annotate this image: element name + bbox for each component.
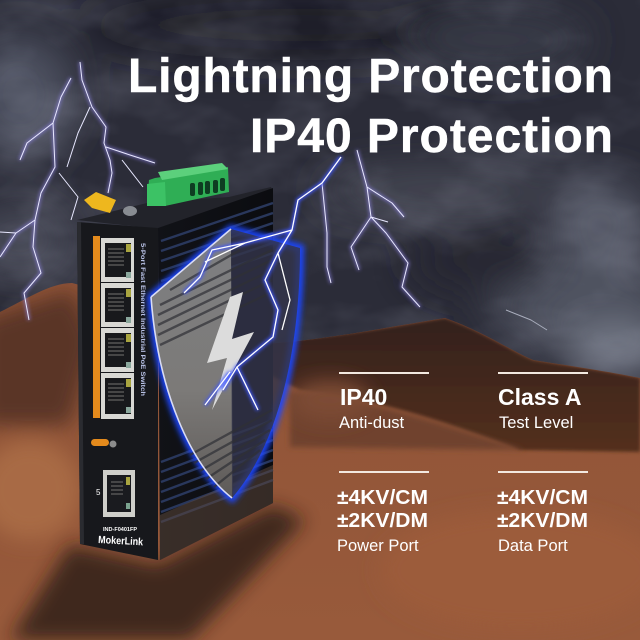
- shield with blue glow: [151, 229, 300, 498]
- Ethernet ports 1-4: [101, 238, 134, 419]
- spec: Class A: Class A: [498, 384, 582, 410]
- model number: IND-F0401FP: [103, 527, 137, 533]
- device top face: [77, 187, 273, 229]
- spec: power port: Power Port: [337, 537, 419, 555]
- terminal block: green connector: [147, 163, 229, 206]
- vertical product label: 5-Port Fast Ethernet Industrial PoE Switch: [139, 243, 146, 396]
- ground screw with yellow terminal: [84, 192, 137, 216]
- spec: data port: Data Port: [498, 537, 568, 555]
- title line 2: IP40 Protection: [250, 110, 613, 163]
- brand logo: MokerLink: [98, 534, 144, 548]
- lightning bolts in sky: [0, 62, 547, 330]
- title line 1: Lightning Protection: [128, 50, 613, 103]
- device front panel: [77, 222, 158, 560]
- background: desert dunes: [0, 283, 640, 640]
- shield fins: [158, 250, 272, 487]
- spec: power port: ±4KV/CM: [337, 487, 428, 509]
- icon: lightning bolt in shield: [207, 292, 254, 410]
- status LEDs: [91, 439, 116, 448]
- Ethernet port 5: [103, 470, 135, 517]
- spec: power port: ±2KV/DM: [337, 510, 428, 532]
- spec: Class A: Test Level: [499, 414, 573, 432]
- orange port strip: [93, 236, 100, 418]
- shadow under device: [10, 505, 305, 640]
- main lightning strike over shield: [184, 157, 341, 410]
- fin edge at left: [77, 222, 84, 544]
- spec: IP40: [339, 372, 429, 432]
- spec: data port: [497, 471, 588, 555]
- spec: data port: ±2KV/DM: [497, 510, 588, 532]
- spec: IP40: Anti-dust: [339, 414, 405, 432]
- background: stormy sky: [0, 0, 640, 400]
- spec: data port: ±4KV/CM: [497, 487, 588, 509]
- spec: Class A: [498, 372, 588, 432]
- title: [128, 50, 613, 163]
- device: industrial PoE switch: [77, 163, 273, 560]
- device side with heat fins: [158, 188, 273, 560]
- port number 5: 5: [96, 488, 101, 497]
- spec: IP40: IP40: [340, 384, 387, 410]
- spec: power port: [337, 471, 429, 555]
